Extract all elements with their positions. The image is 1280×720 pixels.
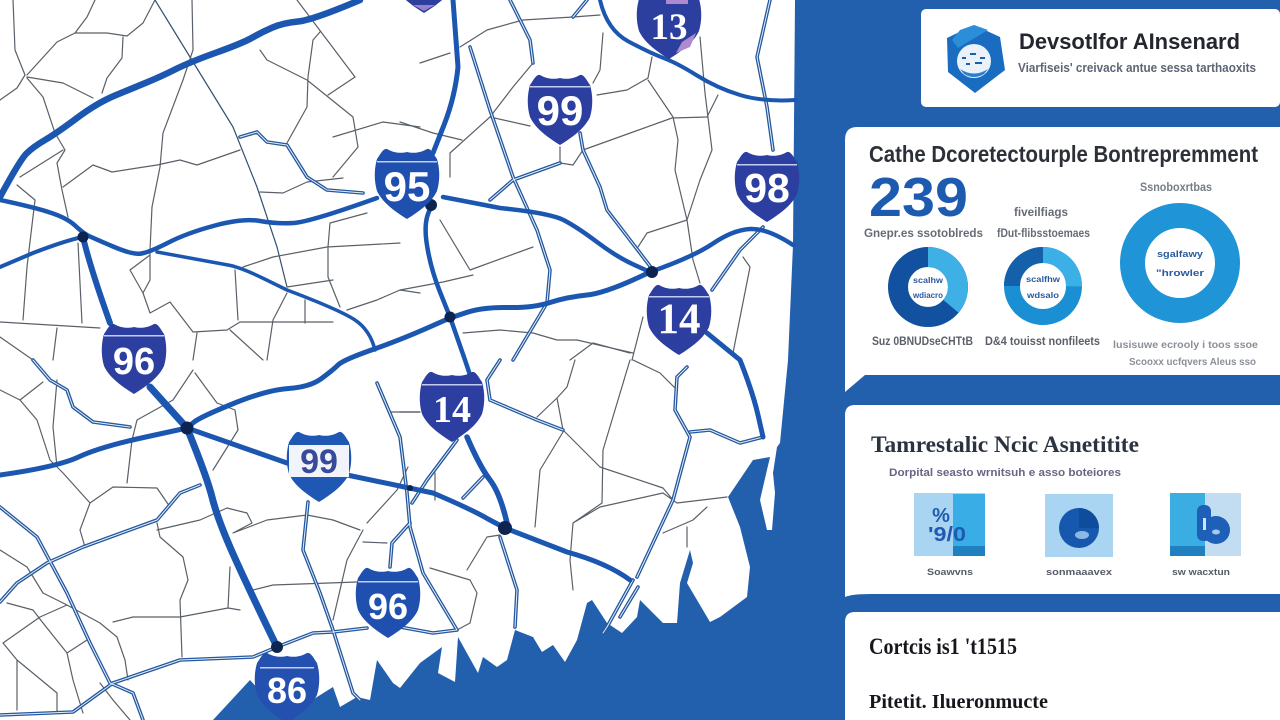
assessment subheading: Dorpital seasto wrnitsuh e asso boteiores: [889, 467, 1121, 479]
chart caption 3: Ssnoboxrtbas: [1140, 180, 1212, 194]
highway shield: 86: [255, 653, 319, 720]
stat caption: Gnepr.es ssotoblreds: [864, 226, 983, 240]
icon tile: pie: [1045, 494, 1113, 557]
highway shield: 96 bottom: [356, 568, 420, 638]
chart caption 2: fDut-flibsstoemaes: [997, 226, 1090, 240]
highway shield: 14 center: [420, 372, 484, 442]
donut label 3: lusisuwe ecrooly i toos ssoe: [1113, 340, 1258, 351]
contacts heading: Cortcis is1 't1515: [869, 634, 1017, 659]
donut chart 3: sgalfawy: [1157, 249, 1203, 259]
contacts subheading: Pitetit. Ilueronmucte: [869, 691, 1048, 713]
highway shield: 86: 86: [267, 670, 307, 711]
interchange nodes: [78, 199, 658, 653]
highway shield: 39: [287, 432, 351, 502]
icon: hexagonal badge: [947, 25, 1005, 93]
donut chart 2: [1012, 255, 1074, 317]
tile label 1: Soawvns: [927, 567, 973, 578]
highway shield: 96 bottom: 96: [368, 586, 408, 627]
header title: Devsotlfor AInsenard: [1019, 29, 1240, 54]
local roads: [0, 0, 750, 720]
panel: statistics: [845, 127, 1280, 392]
donut chart 1: wdiacro: [912, 290, 943, 300]
highway shield: 99: 99: [537, 87, 583, 134]
highway shield: 98: [735, 152, 799, 222]
assessment heading: Tamrestalic Ncic Asnetitite: [871, 432, 1139, 457]
panel: assessment: [845, 405, 1280, 597]
donut chart 3: [1132, 216, 1228, 310]
highway shield: partial top: [392, 0, 456, 13]
panel: contacts: [845, 612, 1280, 720]
donut label 2: D&4 touisst nonfileets: [985, 334, 1100, 348]
donut label 3: [1113, 340, 1258, 368]
icon tile: letter b: [1170, 493, 1241, 556]
header subtitle: Viarfiseis' creivack antue sessa tarthaoxits: [1018, 60, 1256, 75]
tile label 2: sonmaaavex: [1046, 567, 1113, 578]
highway shield: 95: 95: [384, 163, 430, 210]
donut chart 2: scalfhw: [1026, 274, 1060, 284]
highway shield: 13: 13: [650, 7, 688, 48]
highway shield: 96 left: [102, 324, 166, 394]
highway shield: 13: [637, 0, 701, 59]
highway shield: 99: [528, 75, 592, 145]
donut chart 3: "hrowler: [1156, 268, 1205, 278]
donut label 1: Suz 0BNUDseCHTtB: [872, 334, 973, 348]
major highways: [0, 0, 795, 647]
panel: header card: [921, 9, 1280, 107]
highway shield: 98: 98: [744, 165, 790, 211]
donut chart 2: wdsalo: [1026, 290, 1059, 300]
highway shield: 96 left: 96: [113, 341, 155, 383]
donut chart 1: [898, 257, 958, 317]
big number 239: 239: [869, 166, 968, 228]
highway shield: 39: 99: [300, 443, 338, 481]
tile label 3: sw wacxtun: [1172, 567, 1230, 578]
donut chart 1: scalhw: [913, 275, 943, 285]
secondary roads: [0, 0, 773, 720]
icon tile: percent: [914, 493, 985, 556]
highway shield: 95: [375, 149, 439, 219]
map land area: [0, 0, 795, 720]
highway shield: 14 right: [647, 285, 711, 355]
donut label 3: Scooxx ucfqvers Aleus sso: [1129, 357, 1256, 368]
icon tile: percent: %: [932, 505, 950, 527]
highway shield: 14 right: 14: [658, 296, 700, 343]
chart caption 2 top: fiveilfiags: [1014, 205, 1068, 219]
icon tile: percent: '9/0: [928, 524, 966, 546]
highway shield: 14 center: 14: [433, 389, 471, 431]
